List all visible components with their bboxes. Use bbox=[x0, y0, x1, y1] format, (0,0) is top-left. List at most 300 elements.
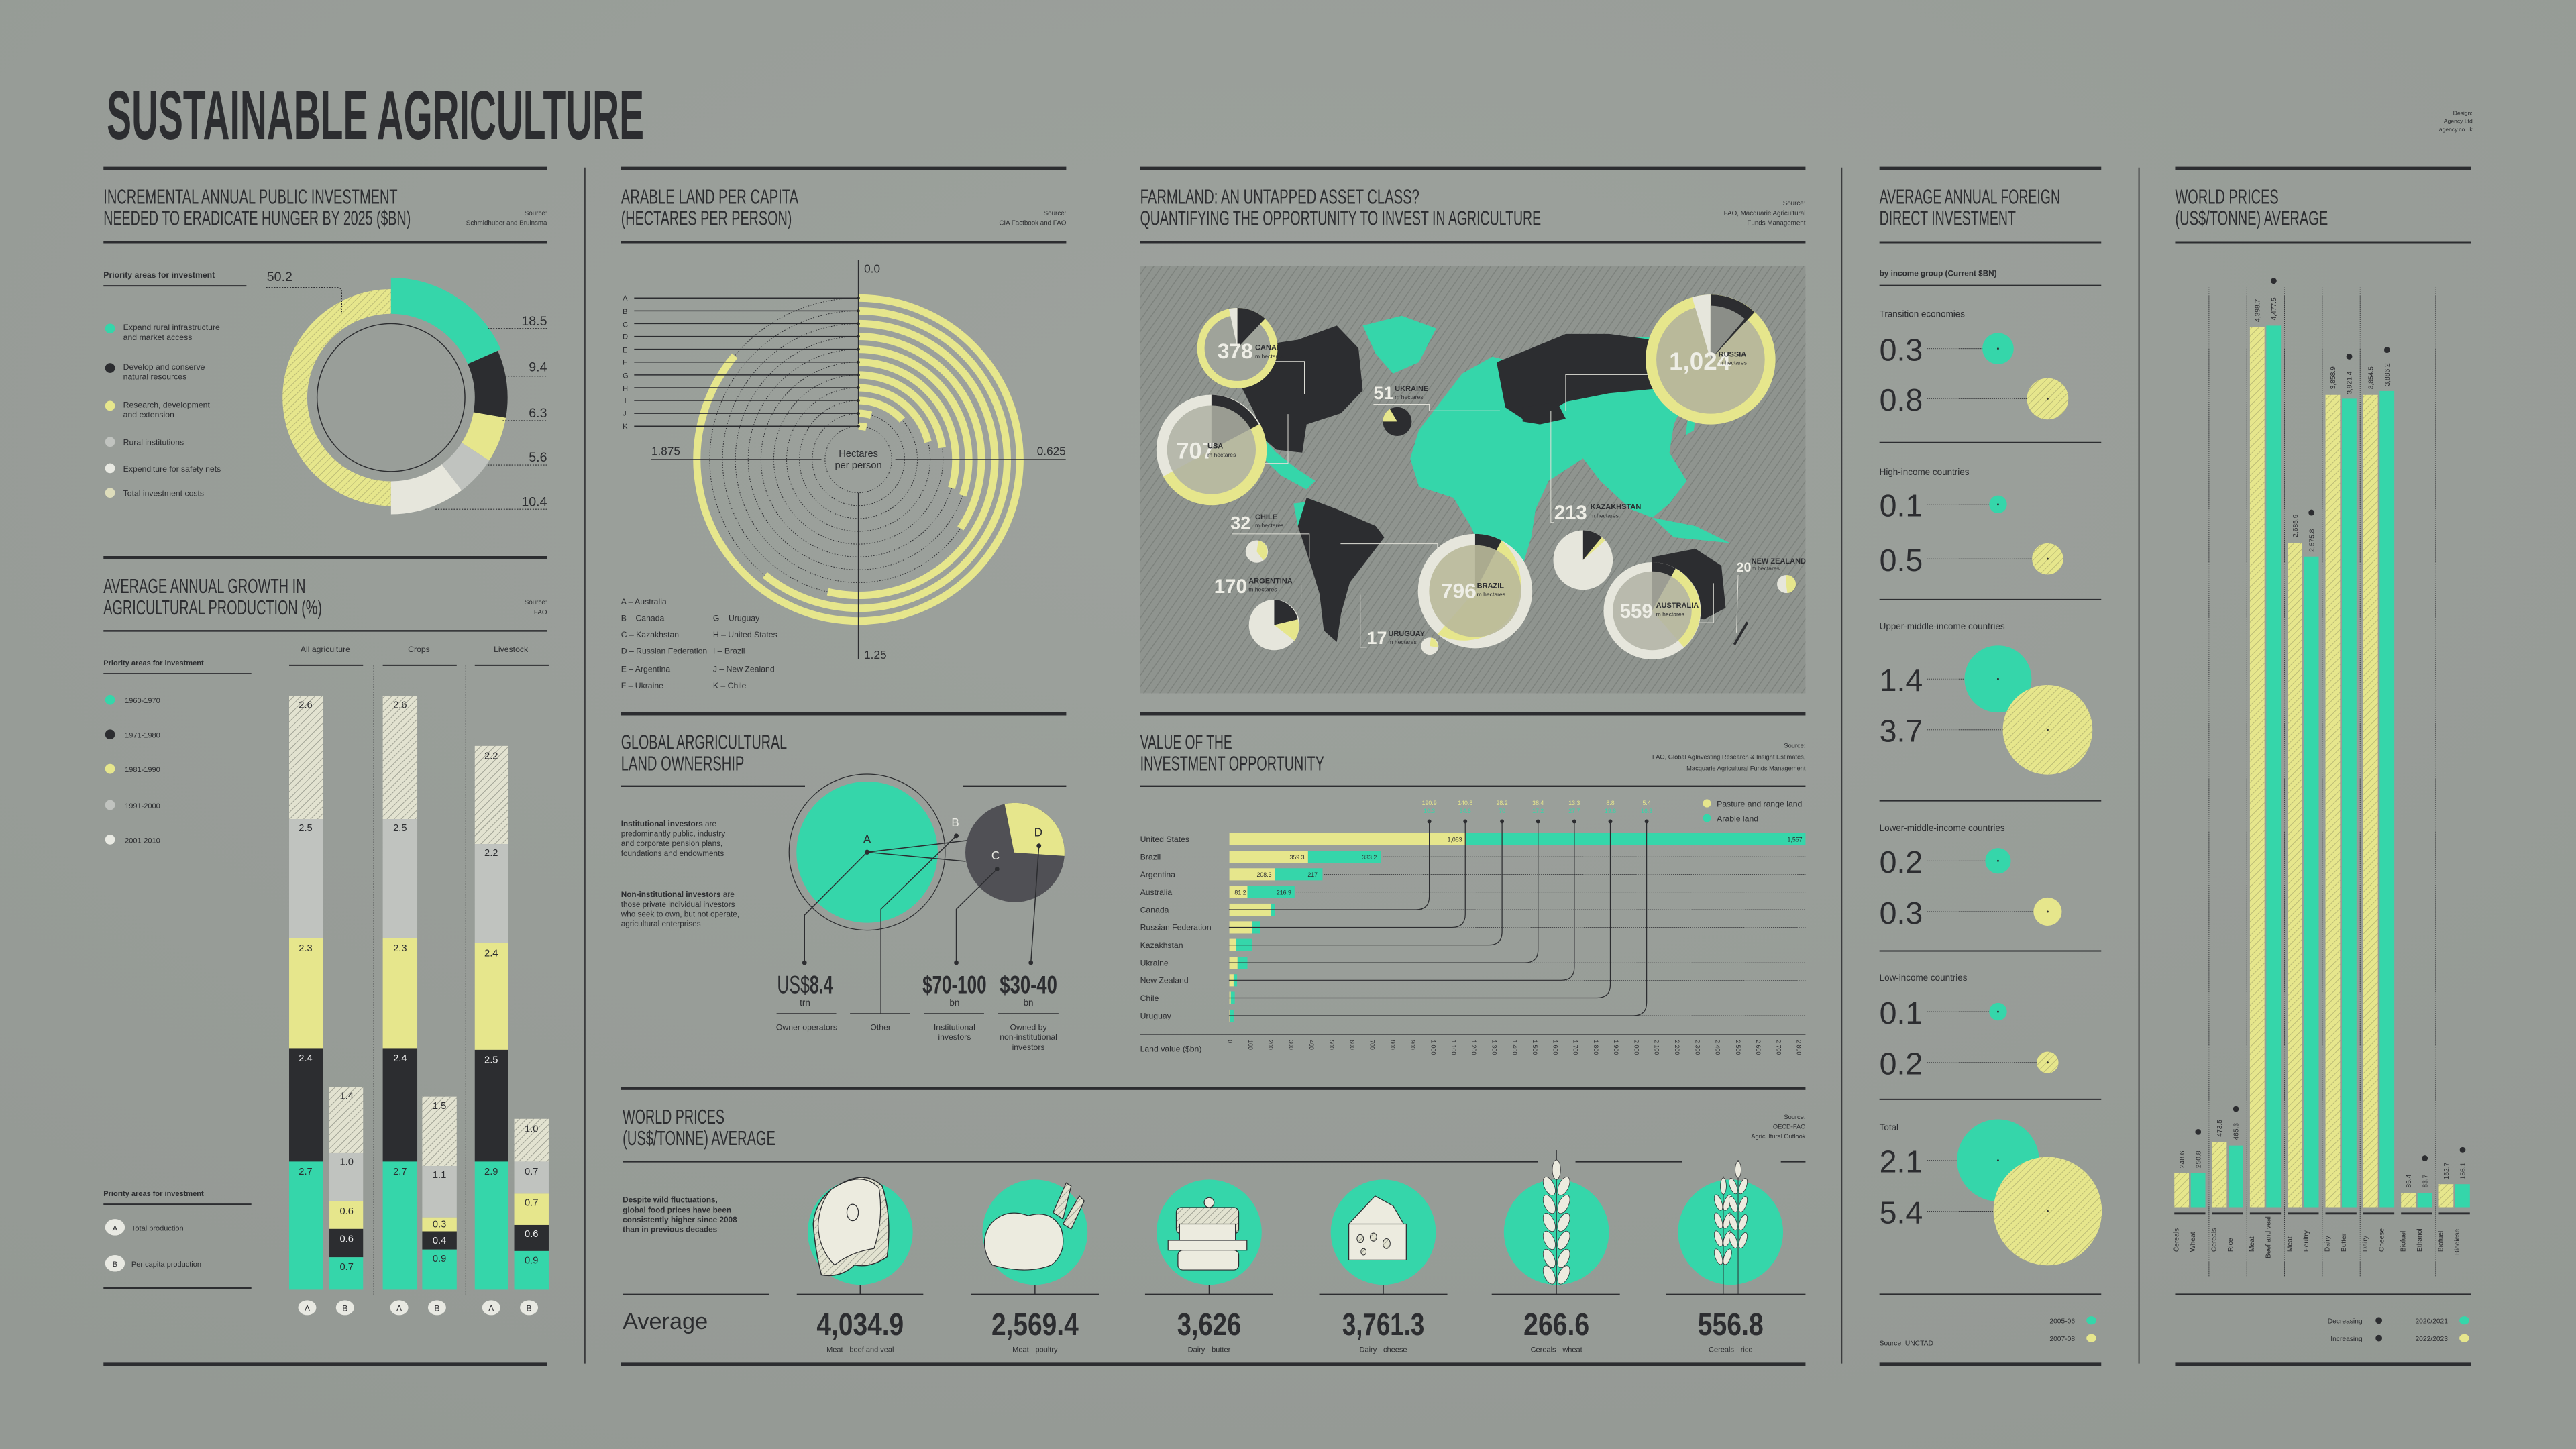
axis: land value: 2,700 bbox=[1776, 1040, 1782, 1055]
panel: value of investment opportunity: FAO, Global AgInvesting Research & Insight Estimates, bbox=[1652, 753, 1805, 760]
Livestock B bbox=[515, 1119, 549, 1161]
heading: land ownership: GLOBAL ARGRICULTURAL bbox=[621, 731, 787, 754]
chart: stacked bars: 2.7 bbox=[393, 1167, 407, 1177]
values: ownership: investors bbox=[1012, 1042, 1045, 1052]
axis: land value: 200 bbox=[1267, 1040, 1274, 1050]
chart: stacked bars: A bbox=[396, 1303, 402, 1313]
values: average prices: 4,034.9 bbox=[816, 1307, 904, 1342]
chart: stacked bars: 0.7 bbox=[525, 1198, 538, 1209]
values: average prices: Cereals - rice bbox=[1709, 1346, 1753, 1354]
legend: A/B: Priority areas for investment bbox=[103, 1190, 204, 1198]
map labels: m hectares bbox=[1255, 353, 1283, 360]
legend: priority areas: Total investment costs bbox=[123, 489, 204, 498]
axis: land value: 2,400 bbox=[1715, 1040, 1721, 1055]
heading: world prices icons: (US$/TONNE) AVERAGE bbox=[623, 1127, 775, 1150]
map labels: m hectares bbox=[1255, 522, 1283, 529]
map labels: m hectares bbox=[1591, 512, 1619, 519]
chart: horizontal bars: 19.6 bbox=[1605, 808, 1616, 814]
chart: horizontal bars: 1,083 bbox=[1448, 837, 1462, 843]
text: investor definitions: those private individual investors bbox=[621, 900, 735, 909]
text: fluctuations note: consistently higher since 2008 bbox=[623, 1216, 737, 1224]
chart: horizontal bars: United States bbox=[1140, 835, 1189, 844]
chart: horizontal bars: 208.3 bbox=[1256, 871, 1272, 878]
chart: horizontal bars: 359.3 bbox=[1289, 854, 1305, 861]
chart: paired bars: 83.7 bbox=[2422, 1174, 2429, 1188]
chart: donut: 18.5 bbox=[521, 314, 547, 329]
heading: world prices icons bbox=[623, 1106, 775, 1150]
panel: foreign direct investment bbox=[1880, 168, 2102, 1364]
chart: radial bars: 0.0 bbox=[864, 262, 880, 276]
chart: radial bars: per person bbox=[835, 460, 882, 471]
legend: FDI years bbox=[1880, 1316, 2096, 1348]
panel: arable land per capita: Source: bbox=[1044, 210, 1066, 217]
heading: FDI bbox=[1880, 186, 2060, 230]
panel: world prices average (food icons): OECD-FAO bbox=[1773, 1123, 1805, 1130]
legend: price trend: 2020/2021 bbox=[2415, 1318, 2448, 1326]
chart: paired bars: 85.4 bbox=[2406, 1174, 2413, 1188]
panel: foreign direct investment: 2.1 bbox=[1880, 1144, 1923, 1179]
Livestock A bbox=[475, 746, 508, 844]
map labels: BRAZIL bbox=[1477, 582, 1504, 590]
icon: cheese bbox=[1331, 1179, 1436, 1295]
text: fluctuations note: global food prices have been bbox=[623, 1205, 731, 1214]
chart: paired bars: Beef and veal bbox=[2265, 1216, 2272, 1258]
icon: butter bbox=[1157, 1179, 1262, 1295]
panel: foreign direct investment: 3.7 bbox=[1880, 714, 1923, 749]
legend: FDI years: 2007-08 bbox=[2049, 1336, 2075, 1343]
axis: land value: 2,200 bbox=[1674, 1040, 1680, 1055]
panel: incremental investment donut: Source: bbox=[525, 210, 547, 217]
chart: ownership circles: A bbox=[863, 832, 871, 845]
chart: paired bars: 3,821.4 bbox=[2347, 371, 2354, 394]
axis: land value: 1,900 bbox=[1613, 1040, 1619, 1055]
axis: land value: 800 bbox=[1389, 1040, 1396, 1050]
panel: value of investment opportunity: Macquarie Agricultural Funds Management bbox=[1686, 765, 1806, 772]
legend: priority areas: Research, development bbox=[123, 400, 210, 409]
map leaders bbox=[1178, 362, 1738, 647]
chart: stacked bars: All agriculture bbox=[301, 645, 350, 654]
values: average prices: 2,569.4 bbox=[991, 1307, 1079, 1342]
map labels: m hectares bbox=[1248, 586, 1277, 593]
map labels: 51 bbox=[1373, 383, 1393, 403]
All A bbox=[289, 696, 323, 819]
panel: foreign direct investment: 5.4 bbox=[1880, 1195, 1923, 1230]
legend: countries A-K: G – Uruguay bbox=[713, 614, 760, 623]
legend: A/B: B bbox=[113, 1260, 117, 1269]
heading: arable land bbox=[621, 186, 799, 230]
chart: horizontal bars: Canada bbox=[1140, 905, 1169, 914]
legend: countries A-K: D – Russian Federation bbox=[621, 647, 707, 656]
chart: stacked bars: 2.3 bbox=[299, 943, 313, 954]
values: ownership: bn bbox=[1024, 998, 1034, 1008]
panel: farmland map: Source: bbox=[1783, 200, 1805, 207]
map labels bbox=[1176, 339, 1806, 648]
labels: FDI groups: Low-income countries bbox=[1880, 973, 1968, 983]
labels: FDI groups: Total bbox=[1880, 1122, 1898, 1132]
panel: incremental investment donut: Schmidhuber and Bruinsma bbox=[466, 220, 547, 227]
values: ownership: Owned by bbox=[1010, 1023, 1047, 1032]
legend: A/B: Per capita production bbox=[131, 1260, 201, 1269]
panel: world prices average (food icons): Source: bbox=[1784, 1114, 1805, 1120]
chart: stacked bars: 0.3 bbox=[433, 1219, 446, 1230]
legend: priority areas: Expenditure for safety nets bbox=[123, 464, 221, 474]
chart: horizontal bars: 28.2 bbox=[1497, 800, 1508, 806]
chart: radial bars: I bbox=[625, 397, 627, 405]
icon: wheat bbox=[1504, 1150, 1609, 1295]
axis: land value: 1,500 bbox=[1532, 1040, 1538, 1055]
chart: horizontal bars: 190.9 bbox=[1422, 800, 1437, 806]
legend: A/B bbox=[103, 1190, 252, 1288]
axis: land value: 300 bbox=[1287, 1040, 1294, 1050]
All B bbox=[329, 1087, 363, 1153]
text: investor definitions: Non-institutional investors are bbox=[621, 890, 735, 899]
axis: land value: 1,800 bbox=[1593, 1040, 1599, 1055]
legend: FDI years: Source: UNCTAD bbox=[1880, 1340, 1933, 1348]
chart: paired bars: 4,398.7 bbox=[2255, 299, 2262, 322]
values: average prices: Cereals - wheat bbox=[1531, 1346, 1582, 1354]
heading: farmland: FARMLAND: AN UNTAPPED ASSET CLASS? bbox=[1140, 186, 1419, 209]
heading: FDI: AVERAGE ANNUAL FOREIGN bbox=[1880, 186, 2060, 209]
chart: paired bars: 3,854.5 bbox=[2368, 366, 2375, 389]
map labels: 559 bbox=[1620, 600, 1653, 623]
axis: land value: 1,700 bbox=[1572, 1040, 1579, 1055]
chart: paired bars: 473.5 bbox=[2216, 1120, 2224, 1137]
text: fluctuations note: than in previous decades bbox=[623, 1226, 718, 1234]
values: ownership: trn bbox=[800, 998, 810, 1008]
map labels: m hectares bbox=[1719, 360, 1747, 366]
chart: stacked bars: 0.9 bbox=[525, 1255, 538, 1266]
chart: stacked bars: 0.7 bbox=[525, 1167, 538, 1177]
chart: paired bars: Butter bbox=[2341, 1233, 2348, 1252]
panel: foreign direct investment: 0.3 bbox=[1880, 896, 1923, 930]
legend: price trend: Decreasing bbox=[2328, 1318, 2363, 1326]
chart: FDI bubbles bbox=[1927, 333, 2102, 1265]
chart: horizontal bars bbox=[1140, 800, 1805, 1022]
chart: radial bars bbox=[623, 260, 1066, 661]
panel: farmland map bbox=[1140, 168, 1806, 693]
map labels: m hectares bbox=[1477, 591, 1505, 598]
map labels: KAZAKHSTAN bbox=[1591, 503, 1641, 511]
chart: stacked bars: A bbox=[305, 1303, 311, 1313]
legend: countries A-K: I – Brazil bbox=[713, 647, 745, 656]
legend: price trend: 2022/2023 bbox=[2415, 1336, 2448, 1343]
chart: horizontal bars: 27.7 bbox=[1568, 808, 1580, 814]
chart: ownership circles: D bbox=[1034, 826, 1042, 839]
panel: foreign direct investment: 1.4 bbox=[1880, 663, 1923, 698]
map labels: URUGUAY bbox=[1388, 630, 1426, 638]
chart: radial bars: K bbox=[623, 423, 628, 431]
design credit: agency.co.uk bbox=[2439, 126, 2473, 133]
map labels: 378 bbox=[1218, 339, 1253, 363]
map labels: m hectares bbox=[1656, 610, 1684, 617]
legend: countries A-K: A – Australia bbox=[621, 597, 667, 606]
chart: donut: 5.6 bbox=[529, 450, 547, 465]
heading: world prices bars: WORLD PRICES bbox=[2175, 186, 2279, 209]
map labels: RUSSIA bbox=[1719, 350, 1746, 358]
legend: decades: 2001-2010 bbox=[125, 837, 160, 845]
chart: donut: 9.4 bbox=[529, 360, 547, 374]
legend: countries A-K: C – Kazakhstan bbox=[621, 630, 679, 639]
chart: paired bars: 3,858.9 bbox=[2330, 366, 2337, 389]
map pies bbox=[1157, 294, 1796, 659]
chart: stacked bars: 2.5 bbox=[484, 1055, 498, 1065]
chart: paired bars: 2,575.8 bbox=[2308, 529, 2316, 552]
values: ownership: non-institutional bbox=[1000, 1032, 1057, 1042]
values: average prices: Dairy - cheese bbox=[1360, 1346, 1407, 1354]
heading: growth: AVERAGE ANNUAL GROWTH IN bbox=[103, 575, 306, 598]
axis: land value: 700 bbox=[1369, 1040, 1376, 1050]
chart: horizontal bars: 70 bbox=[1499, 808, 1505, 814]
text: investor definitions: Institutional investors are bbox=[621, 820, 717, 828]
values: ownership bbox=[776, 971, 1059, 1052]
chart: radial bars: A bbox=[623, 294, 628, 303]
heading: value: INVESTMENT OPPORTUNITY bbox=[1140, 753, 1324, 775]
chart: ownership circles: C bbox=[991, 849, 1000, 862]
panel: world prices bar chart bbox=[2173, 168, 2471, 1364]
labels: FDI groups bbox=[1880, 309, 2005, 1132]
axis: land value: Land value ($bn) bbox=[1140, 1044, 1201, 1053]
axis: land value: 1,300 bbox=[1491, 1040, 1497, 1055]
map labels: m hectares bbox=[1388, 639, 1417, 645]
legend: price trend bbox=[2328, 1316, 2469, 1343]
chart: horizontal bars: Argentina bbox=[1140, 870, 1175, 879]
panel: foreign direct investment: by income group (Current $BN) bbox=[1880, 269, 1997, 278]
values: average prices: Average bbox=[623, 1309, 708, 1334]
panel: growth in agricultural production: Source: bbox=[525, 599, 547, 606]
panel: value of investment opportunity bbox=[1140, 714, 1806, 1055]
heading: arable land: ARABLE LAND PER CAPITA bbox=[621, 186, 799, 209]
heading: growth bbox=[103, 575, 322, 619]
chart: stacked bars: 2.4 bbox=[299, 1053, 313, 1064]
chart: stacked bars: 2.3 bbox=[393, 943, 407, 954]
chart: paired bars: 250.8 bbox=[2195, 1150, 2202, 1168]
panel: foreign direct investment: 0.8 bbox=[1880, 382, 1923, 417]
heading: incremental investment: NEEDED TO ERADICATE HUNGER BY 2025 ($BN) bbox=[103, 207, 411, 230]
chart: paired bars: 4,477.5 bbox=[2271, 297, 2278, 321]
chart: horizontal bars: 16.3 bbox=[1641, 808, 1652, 814]
heading: value bbox=[1140, 731, 1324, 775]
map labels: m hectares bbox=[1208, 451, 1236, 458]
chart: paired bars: Wheat bbox=[2190, 1232, 2197, 1252]
heading: incremental investment bbox=[103, 186, 411, 230]
chart: ownership circles: B bbox=[951, 816, 959, 829]
heading: incremental investment: INCREMENTAL ANNUAL PUBLIC INVESTMENT bbox=[103, 186, 398, 209]
legend: decades: 1981-1990 bbox=[125, 766, 160, 774]
chart: stacked bars: 0.6 bbox=[340, 1206, 354, 1217]
text: investor definitions: who seek to own, but not operate, bbox=[621, 910, 739, 919]
panel: foreign direct investment: 0.5 bbox=[1880, 543, 1923, 578]
axis: land value: 600 bbox=[1348, 1040, 1355, 1050]
map labels: 32 bbox=[1230, 513, 1250, 533]
map labels: 1,024 bbox=[1669, 347, 1731, 375]
chart: stacked bars: 2.2 bbox=[484, 751, 498, 761]
map labels: USA bbox=[1208, 443, 1223, 451]
chart: ownership circles bbox=[789, 774, 1065, 1014]
values: ownership: Other bbox=[870, 1023, 891, 1032]
axis: land value: 2,800 bbox=[1796, 1040, 1803, 1055]
panel: growth in agricultural production bbox=[103, 557, 549, 1364]
chart: stacked bars: 2.7 bbox=[299, 1167, 313, 1177]
text: investor definitions: and corporate pension plans, bbox=[621, 839, 722, 848]
map labels: m hectares bbox=[1395, 394, 1424, 400]
chart: stacked bars: 1.1 bbox=[433, 1170, 446, 1181]
labels: FDI groups: Upper-middle-income countries bbox=[1880, 621, 2005, 631]
values: ownership: investors bbox=[938, 1032, 971, 1042]
chart: stacked bars: 2.6 bbox=[393, 700, 407, 711]
map labels: AUSTRALIA bbox=[1656, 602, 1699, 610]
chart: radial bars: Hectares bbox=[839, 449, 878, 460]
legend: priority areas: Rural institutions bbox=[123, 438, 184, 447]
chart: donut bbox=[266, 270, 547, 515]
icon: poultry bbox=[982, 1179, 1087, 1295]
chart: horizontal bars: Uruguay bbox=[1140, 1011, 1172, 1020]
text: investor definitions: agricultural enterprises bbox=[621, 920, 701, 928]
map labels: m hectares bbox=[1752, 565, 1780, 572]
text: fluctuations note: Despite wild fluctuations, bbox=[623, 1196, 718, 1205]
chart: horizontal bars: Brazil bbox=[1140, 852, 1161, 861]
chart: horizontal bars: 10.3 bbox=[1424, 808, 1435, 814]
heading: FDI: DIRECT INVESTMENT bbox=[1880, 207, 2016, 230]
Crops B bbox=[422, 1097, 457, 1166]
heading: world prices bars: (US$/TONNE) AVERAGE bbox=[2175, 207, 2328, 230]
legend: priority areas: Priority areas for investment bbox=[103, 270, 215, 280]
chart: horizontal bars: 81.2 bbox=[1234, 889, 1246, 896]
map labels: ARGENTINA bbox=[1248, 577, 1293, 585]
chart: radial bars: H bbox=[623, 385, 628, 393]
legend: countries A-K: E – Argentina bbox=[621, 665, 670, 674]
legend: decades: Priority areas for investment bbox=[103, 659, 204, 667]
values: average prices bbox=[623, 1307, 1764, 1354]
values: average prices: Meat - poultry bbox=[1012, 1346, 1058, 1354]
chart: radial bars: 0.625 bbox=[1037, 444, 1066, 458]
map labels: NEW ZEALAND bbox=[1752, 557, 1806, 566]
legend: price trend: Increasing bbox=[2330, 1336, 2363, 1343]
legend: decades: 1991-2000 bbox=[125, 802, 160, 810]
chart: horizontal bars: 1,557 bbox=[1788, 837, 1803, 843]
chart: paired bars bbox=[2173, 278, 2470, 1277]
icon: rice bbox=[1678, 1160, 1783, 1295]
chart: stacked bars: Livestock bbox=[494, 645, 529, 654]
chart: paired bars: Meat bbox=[2249, 1236, 2256, 1252]
axis: land value: 1,200 bbox=[1470, 1040, 1477, 1055]
chart: stacked bars: 1.0 bbox=[340, 1157, 354, 1167]
chart: stacked bars: 1.5 bbox=[433, 1101, 446, 1112]
icon: beef bbox=[808, 1177, 913, 1295]
chart: stacked bars: 2.9 bbox=[484, 1167, 498, 1177]
panel: foreign direct investment: 0.1 bbox=[1880, 488, 1923, 523]
axis: land value: 1,400 bbox=[1511, 1040, 1518, 1055]
chart: paired bars: Biofuel bbox=[2438, 1231, 2445, 1252]
chart: horizontal bars: 216.9 bbox=[1277, 889, 1291, 896]
legend: land type: Arable land bbox=[1717, 814, 1758, 823]
labels: FDI groups: High-income countries bbox=[1880, 467, 1970, 477]
values: average prices: Dairy - butter bbox=[1188, 1346, 1231, 1354]
legend: priority areas: Expand rural infrastructure bbox=[123, 323, 220, 332]
map labels: UKRAINE bbox=[1395, 385, 1428, 393]
chart: radial bars: 1.875 bbox=[651, 444, 680, 458]
values: ownership: $70-100 bbox=[922, 971, 987, 998]
map labels: 170 bbox=[1214, 576, 1247, 598]
axis: land value: 400 bbox=[1308, 1040, 1315, 1050]
chart: horizontal bars: Ukraine bbox=[1140, 958, 1169, 967]
legend: countries A-K: B – Canada bbox=[621, 614, 665, 623]
chart: stacked bars: 2.4 bbox=[393, 1053, 407, 1064]
chart: radial bars: D bbox=[623, 333, 628, 341]
chart: horizontal bars: 333.2 bbox=[1362, 854, 1377, 861]
chart: stacked bars: 0.6 bbox=[340, 1234, 354, 1244]
chart: horizontal bars: New Zealand bbox=[1140, 976, 1189, 985]
legend: land type bbox=[1703, 799, 1803, 823]
values: average prices: 266.6 bbox=[1523, 1307, 1589, 1342]
map bbox=[1140, 266, 1805, 693]
chart: paired bars: Biofuel bbox=[2400, 1231, 2407, 1252]
legend: countries A-K: F – Ukraine bbox=[621, 681, 663, 690]
chart: paired bars: Dairy bbox=[2362, 1235, 2369, 1252]
chart: radial bars: B bbox=[623, 308, 628, 316]
legend: A/B: Total production bbox=[131, 1224, 184, 1232]
design credit: Design: bbox=[2453, 109, 2473, 116]
axis: land value: 100 bbox=[1247, 1040, 1254, 1050]
chart: donut: 50.2 bbox=[267, 270, 292, 284]
chart: horizontal bars: 13.3 bbox=[1568, 800, 1580, 806]
chart: horizontal bars: 8.8 bbox=[1606, 800, 1615, 806]
chart: paired bars: 152.7 bbox=[2443, 1162, 2451, 1179]
legend: countries A-K: K – Chile bbox=[713, 681, 747, 690]
heading: value: VALUE OF THE bbox=[1140, 731, 1232, 754]
chart: paired bars: 2,685.9 bbox=[2292, 514, 2300, 537]
title: SUSTAINABLE AGRICULTURE bbox=[107, 76, 644, 154]
chart: stacked bars: 2.4 bbox=[484, 948, 498, 959]
legend: priority areas: Develop and conserve bbox=[123, 362, 205, 372]
heading: world prices bars bbox=[2175, 186, 2328, 230]
panel: value of investment opportunity: Source: bbox=[1784, 742, 1805, 749]
chart: horizontal bars: Kazakhstan bbox=[1140, 941, 1183, 950]
chart: donut: 10.4 bbox=[521, 494, 547, 509]
map labels: 17 bbox=[1367, 628, 1387, 648]
chart: radial bars: C bbox=[623, 321, 628, 329]
heading: farmland bbox=[1140, 186, 1541, 230]
axis: land value: 500 bbox=[1328, 1040, 1335, 1050]
chart: stacked bars bbox=[289, 645, 549, 1315]
chart: stacked bars: B bbox=[434, 1303, 440, 1313]
panel: foreign direct investment: 0.2 bbox=[1880, 845, 1923, 879]
chart: paired bars: Cereals bbox=[2173, 1228, 2180, 1252]
chart: donut: 6.3 bbox=[529, 406, 547, 421]
chart: radial bars: J bbox=[623, 410, 627, 418]
chart: paired bars: Dairy bbox=[2324, 1235, 2332, 1252]
chart: radial bars: F bbox=[623, 359, 627, 367]
chart: paired bars: Ethanol bbox=[2416, 1228, 2424, 1252]
panel: farmland map: FAO, Macquarie Agricultural bbox=[1724, 210, 1805, 217]
chart: horizontal bars: 38.4 bbox=[1532, 800, 1544, 806]
chart: horizontal bars: 5.4 bbox=[1642, 800, 1651, 806]
chart: radial bars: G bbox=[623, 372, 629, 380]
axis: land value: 900 bbox=[1409, 1040, 1416, 1050]
chart: stacked bars: B bbox=[526, 1303, 532, 1313]
chart: paired bars: 465.3 bbox=[2233, 1123, 2241, 1140]
values: ownership: $30-40 bbox=[1000, 971, 1057, 998]
text: investor definitions: predominantly public, industry bbox=[621, 830, 725, 839]
heading: world prices icons: WORLD PRICES bbox=[623, 1106, 724, 1128]
legend: priority areas: and extension bbox=[123, 410, 174, 419]
design credit: Agency Ltd bbox=[2444, 118, 2473, 125]
panel: farmland map: Funds Management bbox=[1747, 220, 1806, 227]
chart: radial bars: 1.25 bbox=[864, 648, 887, 661]
legend: A/B: A bbox=[113, 1224, 118, 1232]
values: average prices: 3,761.3 bbox=[1342, 1307, 1424, 1342]
heading: arable land: (HECTARES PER PERSON) bbox=[621, 207, 792, 230]
chart: paired bars: Cereals bbox=[2211, 1228, 2218, 1252]
